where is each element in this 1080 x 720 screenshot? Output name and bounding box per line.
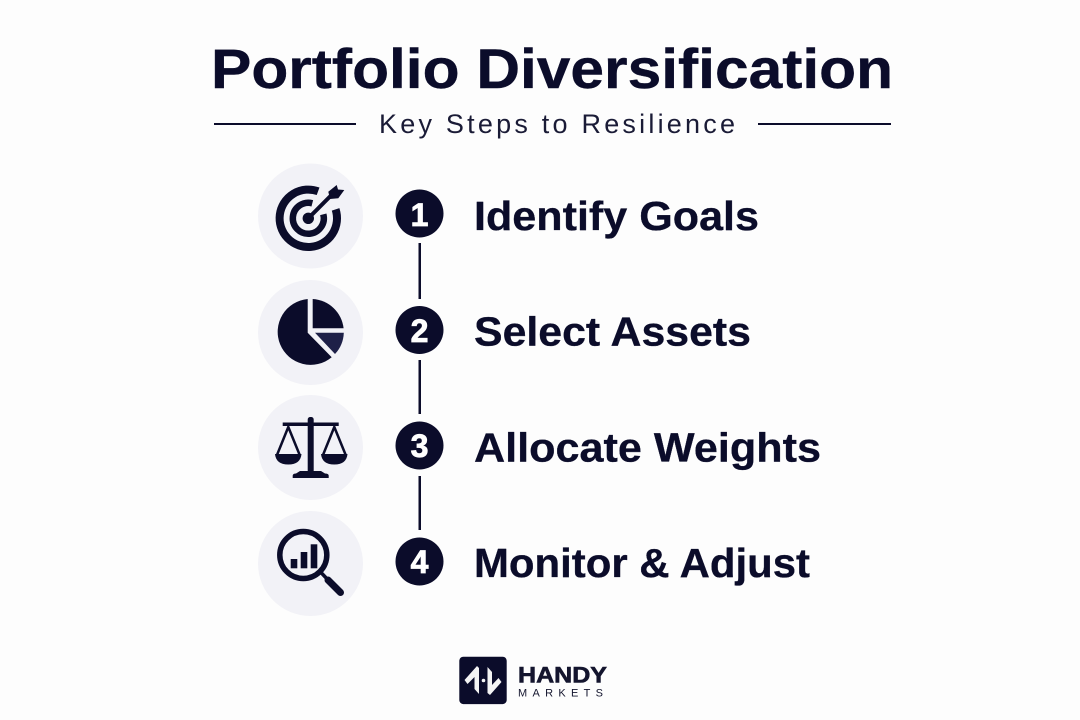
number badge 4 bbox=[396, 538, 444, 586]
title: Portfolio Diversification bbox=[211, 37, 893, 100]
label: identify goals: Identify Goals bbox=[474, 193, 759, 239]
icon: pie chart bbox=[258, 280, 363, 385]
number badge 1 bbox=[396, 190, 444, 238]
label: allocate weights: Allocate Weights bbox=[474, 424, 821, 470]
number badge 1: 1 bbox=[411, 197, 428, 233]
connector 2 to 3 bbox=[418, 360, 421, 414]
icon: target with arrow bbox=[258, 164, 363, 268]
step 2: select assets bbox=[258, 280, 751, 385]
icon: balance scale bbox=[258, 395, 363, 500]
number badge 2: 2 bbox=[411, 313, 428, 349]
icon: magnifier with bars bbox=[258, 511, 363, 616]
connector 3 to 4 bbox=[418, 476, 421, 530]
number badge 2 bbox=[396, 306, 444, 354]
connector 1 to 2 bbox=[418, 243, 421, 299]
logo: handy markets: MARKETS bbox=[518, 688, 603, 700]
label: select assets: Select Assets bbox=[474, 308, 751, 354]
step 3: allocate weights bbox=[258, 395, 821, 500]
number badge 3 bbox=[396, 422, 444, 470]
number badge 3: 3 bbox=[411, 428, 428, 464]
logo: handy markets bbox=[459, 657, 607, 704]
label: monitor and adjust: Monitor & Adjust bbox=[474, 540, 810, 586]
number badge 4: 4 bbox=[411, 544, 429, 580]
subtitle with rules: Key Steps to Resilience bbox=[379, 109, 735, 139]
logo mark bbox=[459, 657, 507, 704]
step 1: identify goals bbox=[258, 164, 759, 268]
step 4: monitor and adjust bbox=[258, 511, 810, 616]
logo wordmark: HANDY bbox=[518, 663, 607, 688]
